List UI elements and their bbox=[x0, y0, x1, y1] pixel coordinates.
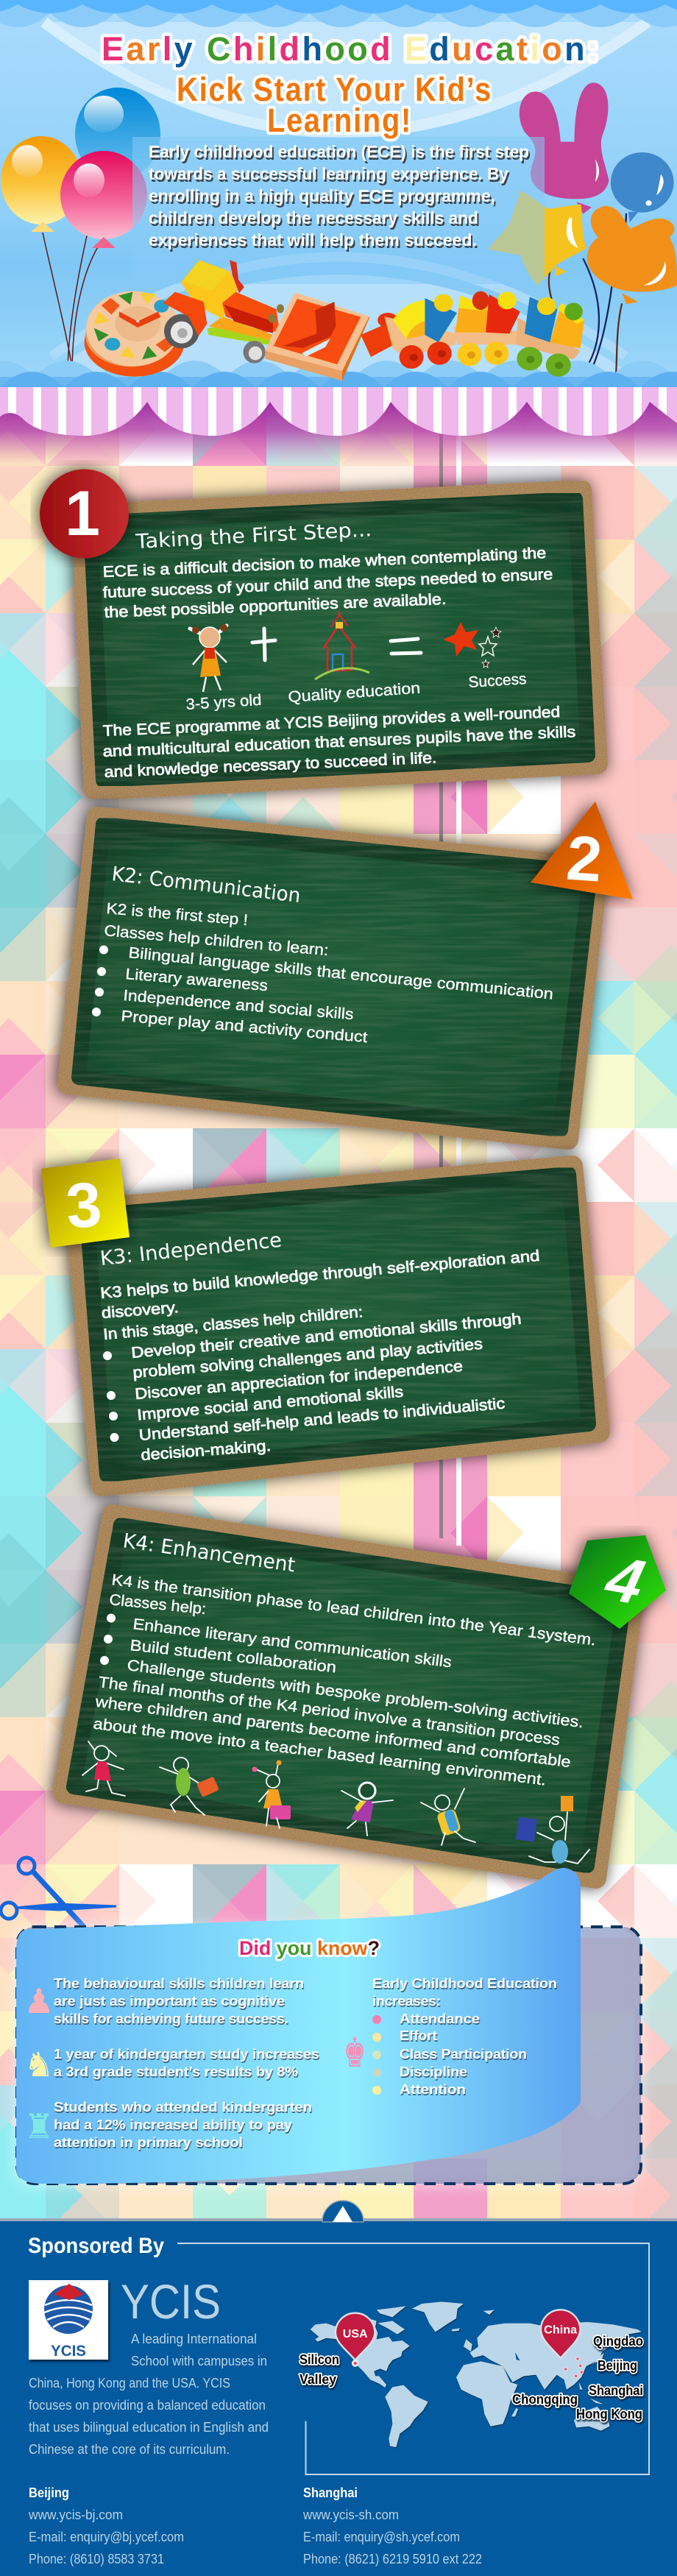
text: K2 body: K2 is the first step ! bbox=[106, 900, 249, 929]
badge 2: 2 bbox=[564, 823, 604, 896]
logo: YCIS: YCIS bbox=[51, 2343, 86, 2360]
text: school description: A leading International bbox=[131, 2332, 257, 2346]
text: school description: China, Hong Kong and the USA. YCIS bbox=[29, 2376, 230, 2391]
pin: USA: USA bbox=[343, 2328, 368, 2340]
text: K2 body: Bilingual language skills that encourage communication bbox=[128, 944, 554, 1003]
world map bbox=[311, 2301, 642, 2447]
subtitle: Kick Start Your Kid’s bbox=[177, 71, 492, 108]
icon captions: 3-5 yrs old bbox=[185, 692, 262, 713]
text: K2 body: Independence and social skills bbox=[123, 987, 354, 1023]
icon: king: ♚ bbox=[344, 2028, 366, 2076]
contact: Shanghai: Phone: (8621) 6219 5910 ext 222 bbox=[303, 2552, 482, 2566]
balloons right bbox=[488, 82, 677, 382]
fact 2 bbox=[54, 2047, 319, 2079]
icon: chalk children row bbox=[82, 1741, 589, 1864]
text: K4 body bbox=[92, 1571, 597, 1789]
text: K4 body: where children and parents become informed and comfortable bbox=[93, 1694, 572, 1771]
map location labels: Hong Kong bbox=[576, 2407, 642, 2421]
tangram tray bbox=[265, 292, 370, 381]
translucent panel behind intro text bbox=[132, 137, 545, 284]
text: ECE intro bbox=[102, 545, 553, 621]
heading: did you know: Did you know? bbox=[239, 1937, 380, 1959]
intro text: towards a successful learning experience. By bbox=[149, 164, 508, 183]
contact: Beijing: Beijing bbox=[29, 2485, 69, 2500]
text: K3 body: Develop their creative and emotional skills through bbox=[130, 1311, 522, 1362]
contact: Shanghai: E-mail: enquiry@sh.ycef.com bbox=[303, 2530, 460, 2544]
arrow tab bbox=[322, 2201, 364, 2222]
text: school description: School with campuses in bbox=[131, 2354, 267, 2368]
fact 1 bbox=[54, 1976, 304, 2026]
background: triangle mosaic bbox=[0, 387, 677, 2227]
text: K4 body: Challenge students with bespoke problem-solving activities. bbox=[126, 1657, 584, 1731]
ECE increases list: Attention bbox=[400, 2082, 466, 2097]
heading: K2 communication: K2: Communication bbox=[110, 863, 302, 907]
map location labels: Silicon bbox=[299, 2352, 339, 2367]
badge 3: 3 bbox=[64, 1170, 104, 1242]
footer: sponsor section bbox=[0, 2201, 677, 2576]
icon captions bbox=[185, 670, 527, 713]
pin: China: China bbox=[544, 2324, 577, 2337]
fact 1: skills for achieving future success. bbox=[54, 2011, 288, 2026]
text: YCIS programme: and knowledge necessary to succeed in life. bbox=[104, 749, 437, 781]
contact: Shanghai: Shanghai bbox=[303, 2485, 358, 2500]
child with blue and yellow body bbox=[421, 1788, 475, 1845]
text: YCIS programme: and multicultural education that ensures pupils have the skills bbox=[102, 723, 576, 760]
ECE increases list: Discipline bbox=[400, 2064, 467, 2079]
icon: girl bbox=[190, 624, 227, 692]
heading: sponsored by: Sponsored By bbox=[28, 2234, 164, 2258]
fact 2: 1 year of kindergarten study increases bbox=[54, 2047, 319, 2062]
frame line bbox=[177, 2243, 649, 2474]
fact 1: The behavioural skills children learn bbox=[54, 1976, 304, 1991]
icon: success star bbox=[443, 622, 501, 668]
text: ECE intro: ECE is a difficult decision to make when contemplating the bbox=[102, 545, 547, 581]
contact: Shanghai bbox=[302, 2485, 482, 2566]
intro text: experiences that will help them succeed. bbox=[149, 230, 477, 250]
subtitle bbox=[177, 71, 492, 139]
child with purple dress bbox=[341, 1783, 393, 1836]
logo: YCIS bbox=[29, 2280, 108, 2360]
child with books bbox=[516, 1796, 589, 1864]
icon: rook: ♜ bbox=[24, 2106, 54, 2146]
contact: Beijing: Phone: (8610) 8583 3731 bbox=[29, 2552, 164, 2566]
pin: China bbox=[541, 2310, 580, 2358]
ECE increases list: Class Participation bbox=[400, 2047, 527, 2062]
text: ECE intro: the best possible opportunities are available. bbox=[104, 591, 447, 621]
fact 3 bbox=[54, 2100, 312, 2150]
map location labels: Shanghai bbox=[589, 2383, 643, 2398]
map location labels: Beijing bbox=[598, 2358, 637, 2373]
fact 3: had a 12% increased ability to pay bbox=[54, 2117, 292, 2132]
heading: K4 enhancement: K4: Enhancement bbox=[121, 1529, 297, 1577]
text: K4 body: Build student collaboration bbox=[129, 1637, 337, 1676]
ECE increases list: Effort bbox=[400, 2028, 437, 2043]
header: top scalloped curtain bbox=[0, 0, 677, 27]
intro text: enrolling in a high quality ECE programme, bbox=[149, 186, 495, 205]
icon: knight: ♞ bbox=[24, 2045, 54, 2084]
purple shadow under canopy bbox=[0, 397, 677, 464]
text: K3 body: K3 helps to build knowledge through self-exploration and bbox=[99, 1248, 540, 1302]
icon captions: Quality education bbox=[288, 679, 421, 706]
vertical hanging cord behind the boards bbox=[439, 434, 461, 1546]
icon captions: Success bbox=[468, 670, 527, 691]
text: K3 body: Discover an appreciation for independence bbox=[134, 1358, 464, 1403]
intro text bbox=[149, 142, 529, 250]
badge 2 bbox=[531, 802, 633, 899]
child with red dress bbox=[82, 1741, 125, 1796]
text: K2 body: Classes help children to learn: bbox=[104, 922, 329, 959]
badge 3 bbox=[41, 1158, 130, 1248]
map location labels: Chongqing bbox=[512, 2392, 578, 2407]
icon: pawn: ♟ bbox=[24, 1981, 54, 2021]
icon: scissors bbox=[1, 1858, 116, 1927]
text: K3 body: problem solving challenges and play activities bbox=[132, 1336, 483, 1381]
heading: taking the first step: Taking the First Step... bbox=[135, 518, 372, 553]
icon: school house bbox=[315, 611, 369, 679]
contact: Beijing bbox=[28, 2485, 184, 2566]
plus sign bbox=[252, 629, 275, 660]
text: K4 body: Classes help: bbox=[109, 1591, 207, 1618]
text: K2 body: Proper play and activity conduct bbox=[121, 1008, 368, 1046]
fact 3: Students who attended kindergarten bbox=[54, 2100, 312, 2115]
text: school description: Chinese at the core of its curriculum. bbox=[29, 2442, 230, 2457]
text: school description bbox=[29, 2332, 269, 2457]
purple rabbit balloon bbox=[520, 82, 609, 214]
contact: Shanghai: www.ycis-sh.com bbox=[302, 2508, 399, 2522]
fact 1: are just as important as cognitive bbox=[54, 1994, 285, 2009]
China campus dots bbox=[564, 2357, 584, 2378]
wordmark: YCIS: YCIS bbox=[121, 2274, 221, 2329]
text: K3 body: In this stage, classes help children: bbox=[102, 1303, 364, 1343]
yellow star balloon bbox=[488, 191, 586, 286]
toy train bbox=[361, 291, 584, 377]
map location labels: Qingdao bbox=[593, 2334, 643, 2349]
badge 1 bbox=[40, 470, 129, 558]
panel: board 1 taking the first step bbox=[82, 490, 598, 790]
child with orange dress and pink bag bbox=[252, 1761, 291, 1828]
title: Early Childhood Education: bbox=[102, 30, 598, 68]
pin: USA bbox=[336, 2313, 375, 2367]
text: K3 body: decision-making. bbox=[141, 1437, 272, 1464]
wooden toys bbox=[85, 260, 584, 381]
fact 3: attention in primary school bbox=[54, 2135, 243, 2150]
child with green body and bag bbox=[160, 1758, 219, 1815]
text: K3 body bbox=[99, 1248, 540, 1464]
panel: board 2 K2 communication bbox=[68, 817, 598, 1139]
text: school description: focuses on providing a balanced education bbox=[29, 2398, 266, 2413]
text: K4 body: about the move into a teacher based learning environment. bbox=[92, 1716, 547, 1789]
intro text: Early childhood education (ECE) is the first step bbox=[149, 142, 529, 161]
ECE increases list bbox=[372, 1976, 557, 2097]
text: K2 body: Literary awareness bbox=[125, 966, 269, 994]
text: YCIS programme bbox=[102, 704, 576, 781]
badge 4 bbox=[569, 1535, 666, 1629]
equals sign bbox=[391, 639, 421, 654]
orange mouse balloon bbox=[587, 206, 677, 304]
text: school description: that uses bilingual education in English and bbox=[29, 2420, 269, 2435]
contact: Beijing: E-mail: enquiry@bj.ycef.com bbox=[29, 2530, 184, 2544]
ECE increases list: Early Childhood Education bbox=[372, 1976, 557, 1991]
map location labels: Valley bbox=[299, 2372, 336, 2387]
panel: board 4 K4 enhancement bbox=[63, 1515, 634, 1878]
text: K2 body bbox=[92, 900, 554, 1046]
fact 2: a 3rd grade student’s results by 8% bbox=[54, 2064, 298, 2079]
text: K3 body: Improve social and emotional skills bbox=[136, 1384, 404, 1423]
text: K3 body: Understand self-help and leads to individualistic bbox=[138, 1395, 506, 1444]
continents bbox=[311, 2301, 642, 2447]
panel: did you know bbox=[16, 1868, 641, 2184]
panel: board 3 K3 independence bbox=[75, 1166, 600, 1486]
text: K4 body: K4 is the transition phase to lead children into the Year 1system. bbox=[110, 1571, 597, 1649]
toy tractor bbox=[163, 260, 284, 364]
curled blue sheet bbox=[16, 1868, 581, 2184]
toy clock bbox=[85, 291, 185, 377]
striped canopy bbox=[0, 387, 677, 436]
badge 1: 1 bbox=[65, 478, 100, 549]
text: ECE intro: future success of your child and the steps needed to ensure bbox=[102, 566, 553, 601]
ECE increases list: increases: bbox=[372, 1994, 441, 2009]
bottom scallops bbox=[0, 361, 677, 387]
contact: Beijing: www.ycis-bj.com bbox=[28, 2508, 123, 2522]
intro text: children develop the necessary skills and bbox=[149, 208, 478, 227]
blue balloon bbox=[611, 152, 674, 222]
dashed frame bbox=[17, 1927, 641, 2184]
subtitle: Learning! bbox=[267, 102, 412, 139]
text: K4 body: The final months of the K4 period involve a transition process bbox=[97, 1674, 561, 1749]
ECE increases list: Attendance bbox=[400, 2011, 480, 2026]
balloons left bbox=[1, 88, 160, 375]
text: K4 body: Enhance literary and communication skills bbox=[132, 1616, 453, 1671]
header: sky background bbox=[0, 0, 677, 387]
map location labels bbox=[299, 2334, 643, 2421]
text: YCIS programme: The ECE programme at YCIS Beijing provides a well-rounded bbox=[102, 704, 561, 740]
heading: K3 independence: K3: Independence bbox=[99, 1229, 283, 1270]
badge 4: 4 bbox=[594, 1544, 659, 1617]
text: K3 body: discovery. bbox=[101, 1299, 180, 1322]
